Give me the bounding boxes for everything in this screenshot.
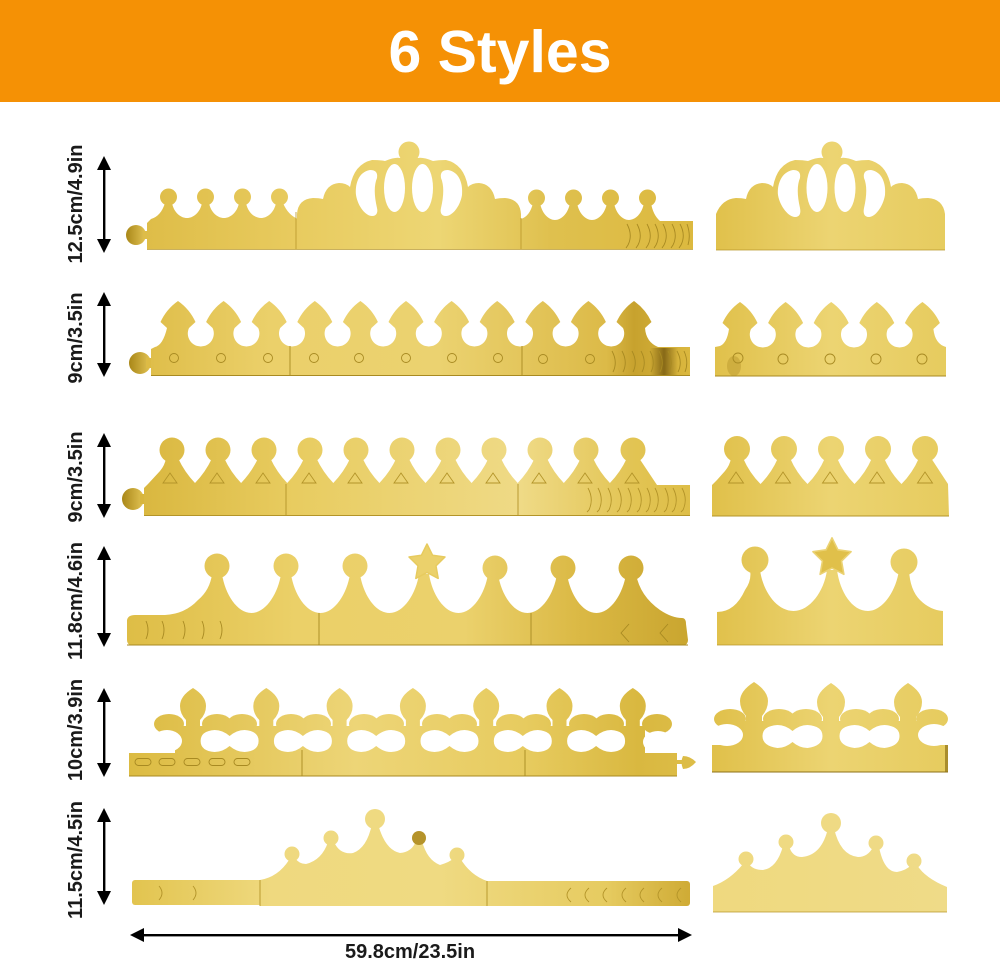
single crown row 2	[715, 302, 946, 376]
height label: row 1: 12.5cm/4.9in	[65, 145, 87, 263]
height arrow: row 1	[97, 156, 111, 253]
crown strip row 4: wide scallops with star	[127, 544, 688, 645]
height arrow: row 6	[97, 808, 111, 905]
title: 6 Styles	[388, 19, 612, 85]
height arrow: row 4	[97, 546, 111, 647]
height arrow: row 5	[97, 688, 111, 777]
icon: star	[409, 544, 445, 578]
crown strip row 5: fleur-de-lis	[129, 688, 696, 776]
height label: row 4: 11.8cm/4.6in	[65, 542, 87, 660]
crown strip row 3: round points with triangles	[122, 438, 690, 516]
height arrow: row 2	[97, 292, 111, 377]
single crown row 4	[717, 538, 943, 645]
height label: row 6: 11.5cm/4.5in	[65, 801, 87, 919]
height label: row 3: 9cm/3.5in	[65, 431, 87, 523]
crown strip row 6: band with five points	[132, 809, 690, 906]
header banner	[0, 0, 1000, 102]
height label: row 5: 10cm/3.9in	[65, 679, 87, 781]
height arrow: row 3	[97, 433, 111, 518]
icon: star	[813, 538, 851, 574]
height label: row 2: 9cm/3.5in	[65, 292, 87, 384]
crown strip row 2: spade points	[129, 301, 690, 376]
crown strip row 1: oval crown, flat	[126, 142, 693, 250]
single crown row 3	[712, 436, 949, 516]
single crown row 5	[711, 682, 950, 772]
single crown row 1	[716, 142, 945, 250]
width arrow	[130, 928, 692, 942]
single crown row 6	[713, 813, 947, 912]
